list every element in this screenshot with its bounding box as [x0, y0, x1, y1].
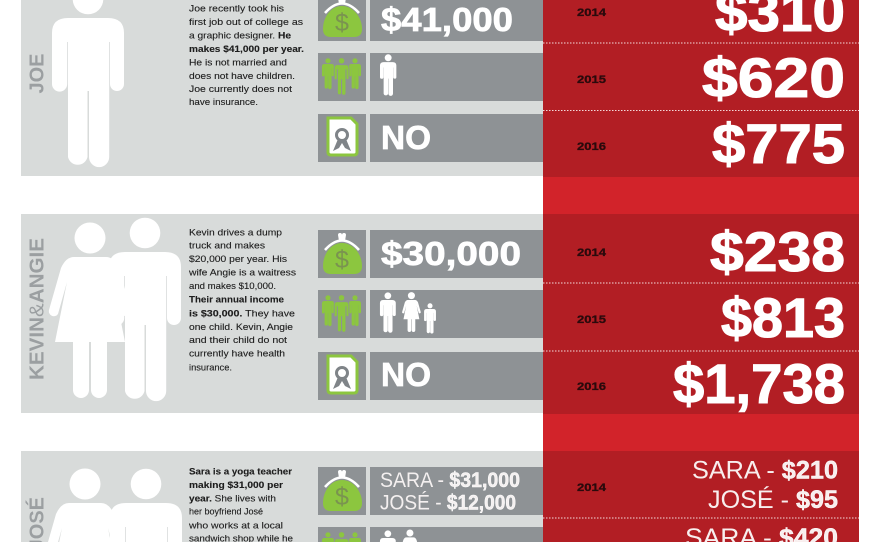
icon: insurance document [318, 114, 366, 162]
figure: adult woman [401, 530, 419, 542]
figure: one adult [380, 54, 396, 96]
description: one child. Kevin, Angie [189, 321, 293, 332]
year 2014: 2014 [577, 247, 607, 259]
insurance bar [370, 352, 543, 400]
income bar [370, 467, 543, 515]
figure: child [424, 303, 436, 334]
year 2016: 2016 [577, 141, 606, 153]
cost 2015: $620 [702, 46, 845, 109]
figure: Joe [52, 0, 124, 167]
description: does not have children. [189, 70, 295, 81]
description: wife Angie is a waitress [188, 266, 296, 277]
panel background [21, 214, 543, 413]
insurance value: NO [381, 119, 431, 156]
red column [543, 0, 859, 542]
income value: $30,000 [381, 235, 521, 272]
description [188, 466, 293, 542]
cost 2015: $813 [721, 286, 845, 349]
insurance value: NO [381, 356, 431, 393]
name label: KEVIN&ANGIE [26, 238, 48, 380]
income values: SARA - $31,000 [380, 469, 520, 492]
icon: family [318, 527, 366, 542]
income bar [370, 230, 543, 278]
year 2014: 2014 [577, 482, 607, 494]
description: makes $41,000 per year. [189, 43, 304, 54]
description: truck and makes [189, 240, 265, 250]
panel background [21, 0, 543, 176]
description: currently have health [189, 347, 285, 358]
cost 2014 [692, 456, 838, 514]
panel: Joe [21, 0, 859, 177]
figure: Angie [49, 222, 131, 398]
year 2015: 2015 [577, 314, 606, 326]
cost panel [543, 0, 859, 177]
cost 2014: $238 [710, 220, 845, 283]
income value: $41,000 [381, 1, 513, 38]
description [189, 2, 304, 107]
description [188, 226, 296, 372]
family bar [370, 53, 543, 101]
income bar [370, 0, 543, 41]
icon: money bag [318, 467, 366, 515]
figure: adult man [380, 292, 396, 333]
figure: adult man [380, 530, 396, 542]
description: and makes $10,000. [189, 280, 276, 291]
cost 2016: $1,738 [673, 352, 845, 415]
cost panel [543, 214, 859, 414]
income values: JOSÉ - $12,000 [380, 492, 516, 514]
description: and their child do not [189, 334, 287, 345]
panel: Kevin and Angie [21, 214, 859, 415]
income values [380, 469, 520, 514]
year 2014: 2014 [577, 7, 607, 19]
description: have insurance. [189, 96, 258, 107]
figure: Sara [44, 468, 126, 542]
description: He is not married and [189, 56, 287, 68]
icon: money bag [318, 230, 366, 278]
panel: Sara and José [21, 451, 859, 542]
description: year. She lives with [189, 492, 276, 503]
cost 2016: $775 [712, 112, 845, 175]
icon: family [318, 53, 366, 101]
icon: money bag [318, 0, 366, 41]
description: first job out of college as [189, 16, 303, 27]
description: Joe recently took his [189, 2, 284, 14]
family bar [370, 290, 543, 338]
description: Their annual income [189, 294, 284, 305]
cost 2014: SARA - $210 [692, 456, 838, 484]
name label: JOE [26, 54, 48, 94]
description: Joe currently does not [189, 83, 292, 94]
description: a graphic designer. He [189, 30, 291, 40]
description: is $30,000. They have [189, 308, 295, 319]
panel background [21, 451, 543, 542]
description: making $31,000 per [189, 479, 283, 490]
figure: adult woman [402, 292, 421, 332]
icon: insurance document [318, 352, 366, 400]
cost panel [543, 451, 859, 542]
cost 2014: JOSÉ - $95 [708, 485, 838, 514]
family bar [370, 527, 543, 542]
figure: Kevin [109, 218, 181, 401]
year 2016: 2016 [577, 381, 606, 393]
description: $20,000 per year. His [189, 253, 287, 264]
description: her boyfriend José [189, 506, 263, 517]
description: who works at a local [188, 519, 283, 530]
description: insurance. [189, 361, 232, 372]
description: Kevin drives a dump [189, 226, 282, 237]
description: Sara is a yoga teacher [189, 466, 292, 477]
year 2015: 2015 [577, 74, 606, 86]
figure: José [110, 469, 182, 542]
insurance bar [370, 114, 543, 162]
icon: family [318, 290, 366, 338]
